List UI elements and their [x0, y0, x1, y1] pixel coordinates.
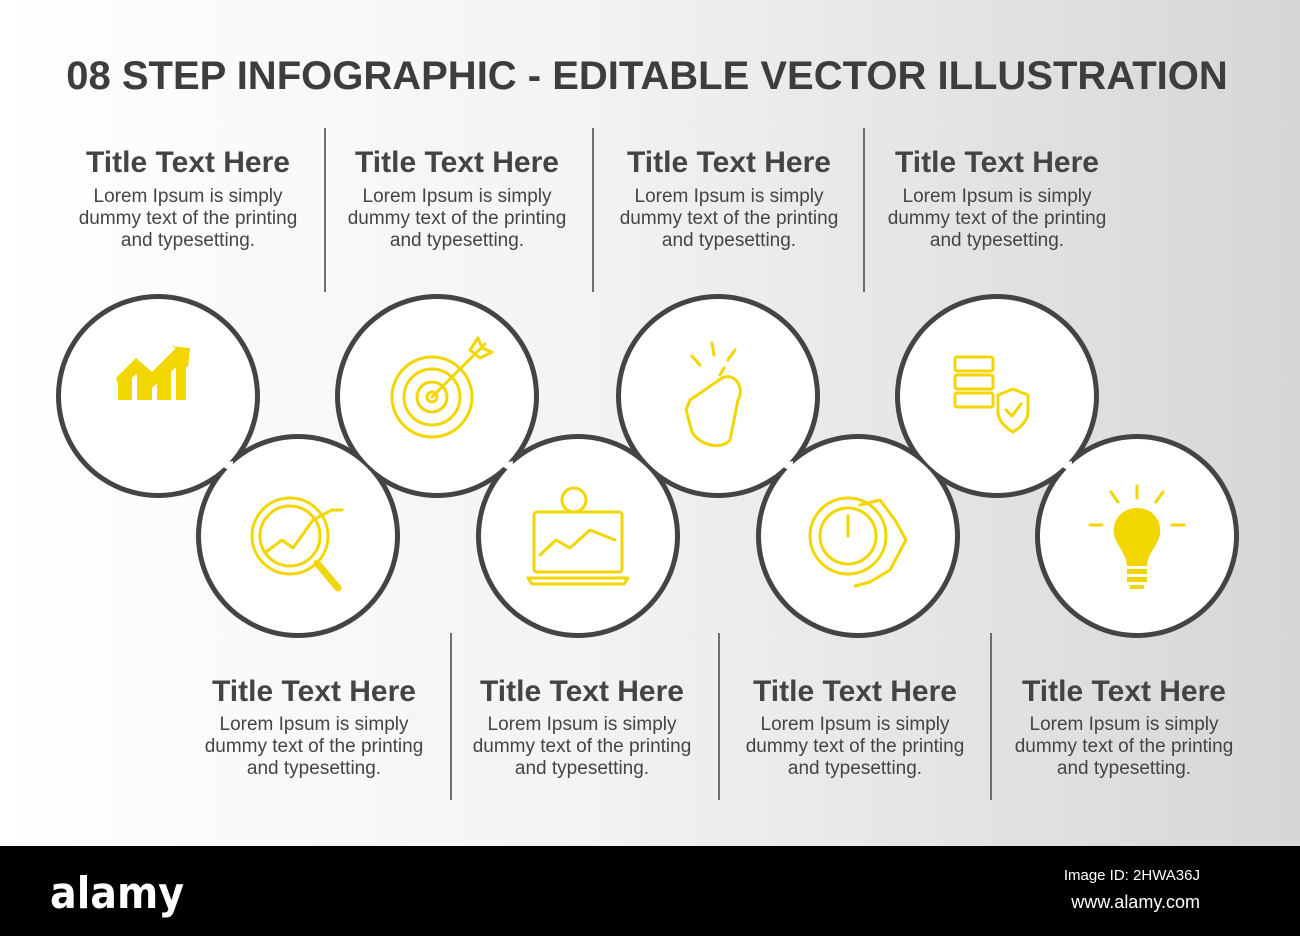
footer bar: [0, 846, 1300, 936]
bottom text blocks: Lorem Ipsum is simply: [760, 714, 950, 735]
bottom text blocks: Title Text Here: [753, 675, 957, 708]
bottom text blocks: and typesetting.: [247, 758, 381, 779]
title: 08 STEP INFOGRAPHIC - EDITABLE VECTOR ILLUSTRATION: [66, 54, 1228, 98]
bottom text blocks: Title Text Here: [212, 675, 416, 708]
top text blocks: dummy text of the printing: [620, 208, 838, 229]
bottom text blocks: dummy text of the printing: [1015, 736, 1233, 757]
bottom text blocks: [205, 675, 1233, 779]
top text blocks: dummy text of the printing: [888, 208, 1106, 229]
bottom text blocks: Title Text Here: [1022, 675, 1226, 708]
top text blocks: Lorem Ipsum is simply: [902, 186, 1092, 207]
top text blocks: [79, 146, 1106, 251]
bottom text blocks: and typesetting.: [788, 758, 922, 779]
top text blocks: Lorem Ipsum is simply: [94, 186, 283, 207]
top text blocks: Title Text Here: [86, 146, 290, 179]
top text blocks: and typesetting.: [662, 230, 796, 251]
top text blocks: Title Text Here: [355, 146, 559, 179]
bottom text blocks: Lorem Ipsum is simply: [488, 714, 677, 735]
top text blocks: and typesetting.: [390, 230, 524, 251]
top text blocks: dummy text of the printing: [79, 208, 297, 229]
bottom text blocks: dummy text of the printing: [746, 736, 964, 757]
top text blocks: Lorem Ipsum is simply: [634, 186, 824, 207]
bottom text blocks: and typesetting.: [515, 758, 649, 779]
bottom text blocks: dummy text of the printing: [473, 736, 691, 757]
top text blocks: Title Text Here: [895, 146, 1099, 179]
bottom text blocks: Title Text Here: [480, 675, 684, 708]
bottom text blocks: dummy text of the printing: [205, 736, 423, 757]
bottom text blocks: Lorem Ipsum is simply: [220, 714, 409, 735]
icons: [116, 338, 1184, 589]
top text blocks: and typesetting.: [121, 230, 255, 251]
footer bar: alamy: [50, 868, 184, 919]
top text blocks: Title Text Here: [627, 146, 831, 179]
top text blocks: dummy text of the printing: [348, 208, 566, 229]
circles chain: [56, 294, 1239, 638]
top text blocks: Lorem Ipsum is simply: [362, 186, 552, 207]
footer bar: Image ID: 2HWA36J: [1064, 867, 1200, 884]
top text blocks: and typesetting.: [930, 230, 1064, 251]
bottom text blocks: and typesetting.: [1057, 758, 1191, 779]
footer bar: www.alamy.com: [1070, 892, 1200, 912]
bottom text blocks: Lorem Ipsum is simply: [1030, 714, 1219, 735]
